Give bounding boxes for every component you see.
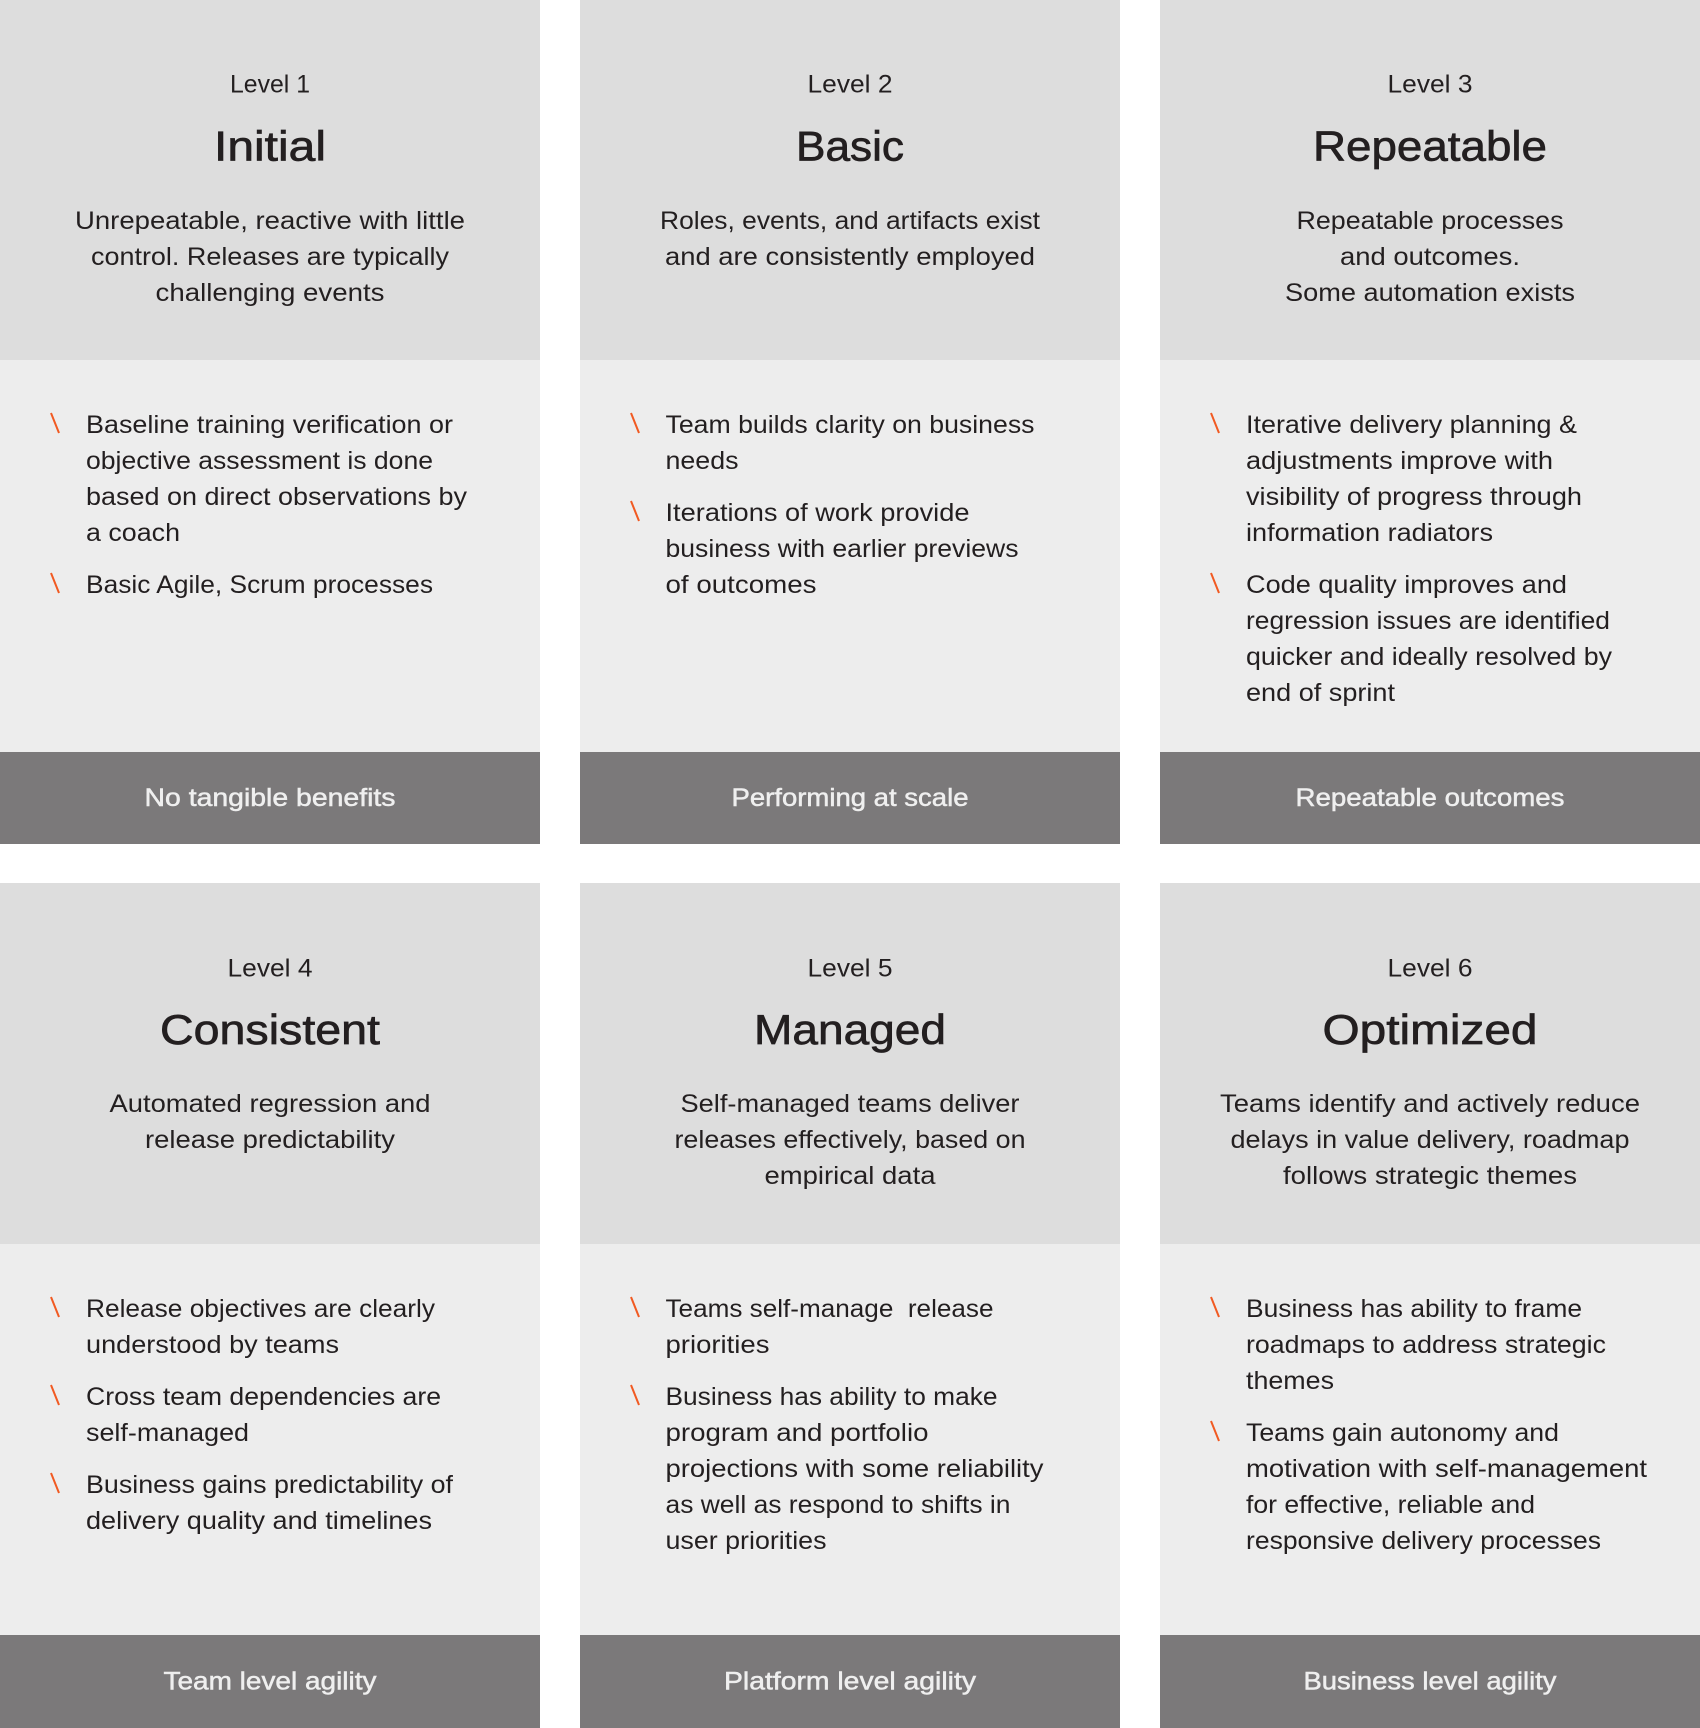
bullet bbox=[631, 1383, 1044, 1555]
bullet bbox=[1211, 1419, 1647, 1555]
title: Initial bbox=[214, 122, 326, 170]
bullet: needs bbox=[666, 447, 738, 475]
description: release predictability bbox=[145, 1126, 396, 1154]
footer label: Business level agility bbox=[1304, 1668, 1557, 1696]
bullet: adjustments improve with bbox=[1246, 447, 1553, 475]
bullet bbox=[631, 1295, 994, 1359]
footer band bbox=[580, 1635, 1120, 1728]
header band bbox=[0, 883, 540, 1244]
panel: level 3 repeatable bbox=[1160, 0, 1700, 844]
body band bbox=[580, 1244, 1120, 1635]
body band bbox=[0, 1244, 540, 1635]
bullet: Business gains predictability of bbox=[86, 1471, 453, 1499]
footer band bbox=[1160, 752, 1700, 844]
level label: Level 2 bbox=[808, 70, 892, 98]
bullet: delivery quality and timelines bbox=[86, 1507, 432, 1535]
bullet: Iterative delivery planning & bbox=[1246, 411, 1577, 439]
bullet: program and portfolio bbox=[666, 1419, 928, 1447]
bullet: Release objectives are clearly bbox=[86, 1295, 436, 1323]
bullet bbox=[51, 1383, 441, 1447]
bullet: of outcomes bbox=[666, 571, 816, 599]
description: and outcomes. bbox=[1340, 243, 1520, 271]
bullet: visibility of progress through bbox=[1246, 483, 1582, 511]
body band bbox=[580, 360, 1120, 752]
footer band bbox=[1160, 1635, 1700, 1728]
description: Automated regression and bbox=[110, 1090, 430, 1118]
description bbox=[1220, 1090, 1640, 1190]
title: Repeatable bbox=[1313, 122, 1547, 170]
footer label: No tangible benefits bbox=[144, 784, 396, 812]
description: Unrepeatable, reactive with little bbox=[75, 207, 465, 235]
body band bbox=[0, 360, 540, 752]
bullet: priorities bbox=[666, 1331, 770, 1359]
title: Basic bbox=[796, 122, 904, 170]
description bbox=[1285, 207, 1575, 307]
level label: Level 3 bbox=[1388, 70, 1472, 98]
footer label: Repeatable outcomes bbox=[1296, 784, 1564, 812]
bullet: understood by teams bbox=[86, 1331, 339, 1359]
description: releases effectively, based on bbox=[674, 1126, 1026, 1154]
description: Some automation exists bbox=[1285, 279, 1575, 307]
bullet: Teams self-manage release bbox=[666, 1295, 993, 1323]
bullet: user priorities bbox=[666, 1527, 826, 1555]
bullet: Teams gain autonomy and bbox=[1246, 1419, 1559, 1447]
description bbox=[110, 1090, 430, 1154]
description: challenging events bbox=[156, 279, 384, 307]
header band bbox=[0, 0, 540, 360]
bullet: projections with some reliability bbox=[666, 1455, 1044, 1483]
bullet: information radiators bbox=[1246, 519, 1493, 547]
panel: level 4 consistent bbox=[0, 883, 540, 1728]
bullet: based on direct observations by bbox=[86, 483, 468, 511]
panel: level 5 managed bbox=[580, 883, 1120, 1728]
bullet bbox=[631, 499, 1018, 599]
bullet bbox=[51, 1471, 453, 1535]
bullet: regression issues are identified bbox=[1246, 607, 1610, 635]
bullet: Business has ability to make bbox=[666, 1383, 998, 1411]
bullet: as well as respond to shifts in bbox=[666, 1491, 1010, 1519]
bullet: Basic Agile, Scrum processes bbox=[86, 571, 433, 599]
description: Roles, events, and artifacts exist bbox=[660, 207, 1040, 235]
panel: level 2 basic bbox=[580, 0, 1120, 844]
bullet bbox=[1211, 1295, 1606, 1395]
description: empirical data bbox=[764, 1162, 936, 1190]
description bbox=[674, 1090, 1026, 1190]
description: follows strategic themes bbox=[1283, 1162, 1577, 1190]
bullet: roadmaps to address strategic bbox=[1246, 1331, 1606, 1359]
bullet bbox=[51, 411, 468, 547]
header band bbox=[580, 0, 1120, 360]
bullet: quicker and ideally resolved by bbox=[1246, 643, 1613, 671]
description bbox=[75, 207, 465, 307]
header band bbox=[1160, 0, 1700, 360]
footer band bbox=[0, 752, 540, 844]
panel: level 6 optimized bbox=[1160, 883, 1700, 1728]
title: Optimized bbox=[1322, 1006, 1538, 1053]
description: Self-managed teams deliver bbox=[680, 1090, 1020, 1118]
level label: Level 1 bbox=[230, 70, 310, 98]
description: delays in value delivery, roadmap bbox=[1230, 1126, 1630, 1154]
header band bbox=[1160, 883, 1700, 1244]
bullet bbox=[51, 1295, 436, 1359]
footer band bbox=[0, 1635, 540, 1728]
panel: level 1 initial bbox=[0, 0, 540, 844]
body band bbox=[1160, 1244, 1700, 1635]
bullet: for effective, reliable and bbox=[1246, 1491, 1535, 1519]
bullet: motivation with self-management bbox=[1246, 1455, 1647, 1483]
bullet: Baseline training verification or bbox=[86, 411, 453, 439]
bullet bbox=[631, 411, 1034, 475]
footer label: Platform level agility bbox=[724, 1668, 977, 1696]
bullet bbox=[1211, 571, 1613, 707]
description: control. Releases are typically bbox=[91, 243, 450, 271]
footer label: Performing at scale bbox=[732, 784, 968, 812]
bullet: Business has ability to frame bbox=[1246, 1295, 1582, 1323]
bullet: themes bbox=[1246, 1367, 1334, 1395]
bullet bbox=[1211, 411, 1582, 547]
description: Repeatable processes bbox=[1296, 207, 1564, 235]
footer band bbox=[580, 752, 1120, 844]
bullet: responsive delivery processes bbox=[1246, 1527, 1601, 1555]
bullet: objective assessment is done bbox=[86, 447, 433, 475]
description bbox=[660, 207, 1040, 271]
bullet: Team builds clarity on business bbox=[666, 411, 1034, 439]
bullet: end of sprint bbox=[1246, 679, 1395, 707]
body band bbox=[1160, 360, 1700, 752]
title: Managed bbox=[754, 1006, 946, 1053]
title: Consistent bbox=[160, 1006, 380, 1053]
bullet: a coach bbox=[86, 519, 180, 547]
header band bbox=[580, 883, 1120, 1244]
bullet: self-managed bbox=[86, 1419, 249, 1447]
level label: Level 4 bbox=[228, 954, 313, 982]
bullet: Cross team dependencies are bbox=[86, 1383, 441, 1411]
bullet: Code quality improves and bbox=[1246, 571, 1567, 599]
bullet: Iterations of work provide bbox=[666, 499, 970, 527]
description: and are consistently employed bbox=[665, 243, 1035, 271]
description: Teams identify and actively reduce bbox=[1220, 1090, 1640, 1118]
level label: Level 6 bbox=[1388, 954, 1472, 982]
footer label: Team level agility bbox=[164, 1668, 377, 1696]
level label: Level 5 bbox=[808, 954, 892, 982]
bullet: business with earlier previews bbox=[666, 535, 1018, 563]
